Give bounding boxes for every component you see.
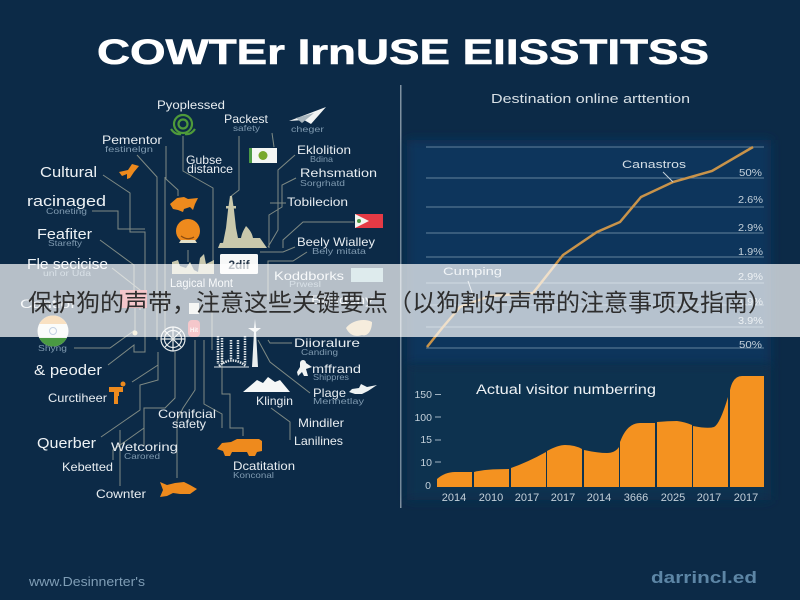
label: racinaged: [27, 193, 106, 216]
icon: city towers: [214, 336, 249, 367]
label: racinaged: racinaged: [27, 193, 106, 210]
icon: red rectangle: [120, 290, 147, 308]
label: Mindiler: Mindiler: [298, 416, 344, 430]
percent axis labels: 2.9%: [738, 272, 763, 283]
year axis: 2014: [442, 492, 466, 504]
vertical divider: [400, 85, 402, 508]
label: Koddborks: Prwesl: [289, 279, 321, 289]
icon: green dot flag: [249, 148, 277, 163]
percent axis labels: 2.6%: [738, 195, 763, 206]
label: Dliorature: Canding: [301, 347, 338, 357]
label: Fle secicise: unl or Uda: [43, 268, 91, 278]
label: & peoder: & peoder: [34, 362, 102, 379]
bar chart heading: Actual visitor numberring: [476, 382, 656, 397]
label: Comifcial safety: [158, 407, 216, 431]
year axis: 2017: [697, 492, 721, 504]
label: Cownter: Cownter: [96, 487, 146, 501]
label: Dliorature: Diioralure: [294, 336, 360, 350]
line series: [427, 147, 753, 347]
label: racinaged: Coneting: [46, 206, 87, 216]
icon: orange bird: [119, 164, 139, 179]
label: Dliorature: [294, 336, 360, 357]
percent axis labels: 1.9%: [738, 247, 763, 258]
label: mffrand: mffrand: [312, 362, 361, 376]
connector lines: [74, 133, 354, 486]
label: Rehsmation: Sorgrhatd: [300, 178, 345, 188]
label: Comifcial safety: Comifcial: [158, 407, 216, 421]
label: Feafiter: Starefty: [48, 238, 83, 248]
label: Pementor: [102, 133, 162, 154]
label: cheger: cheger: [291, 124, 324, 134]
overlay headline: 保护狗的声带，注意这些关键要点（以狗割好声带的注意事项及指南）: [28, 283, 772, 318]
label: mffrand: [312, 362, 361, 382]
label: Pementor: festinelgn: [105, 144, 153, 154]
icon: landscape flag: [351, 268, 383, 282]
label: Eklolition: Eklolition: [297, 143, 351, 157]
panel: line chart background: [407, 140, 771, 365]
label: Wetcoring: [111, 440, 178, 461]
icon: orange T figure: [109, 382, 126, 404]
label: Rehsmation: Rehsmation: [300, 166, 377, 180]
icon: dot: [132, 330, 138, 336]
year axis: 2017: [734, 492, 758, 504]
icon: running figure: [297, 360, 312, 376]
label: Kebetted: Kebetted: [62, 460, 113, 474]
label: Gubse distance: Gubse: [186, 153, 222, 167]
percent axis labels: 3.9%: [738, 316, 763, 327]
value axis: 0: [425, 480, 431, 492]
label: Wetcoring: Carored: [124, 451, 160, 461]
label: Shyng: Shyng: [38, 343, 67, 353]
icon: orange dome: [176, 219, 200, 243]
label: Wetcoring: Wetcoring: [111, 440, 178, 454]
label: Cultural: Cultural: [40, 164, 97, 181]
label: Gubse distance: distance: [187, 162, 233, 176]
label: Tobilecion: Tobilecion: [287, 195, 348, 209]
year axis: 2025: [661, 492, 685, 504]
label: Koddborks: [274, 269, 344, 289]
year axis: 2014: [587, 492, 611, 504]
label: Dcatitation: Dcatitation: [233, 459, 295, 473]
label: Legal Mont: Lagical Mont: [170, 276, 234, 290]
label: Klingin: Klingin: [256, 394, 293, 408]
line chart: [426, 147, 764, 351]
overlay band: [0, 264, 800, 337]
label: mffrand: Shippres: [313, 372, 349, 382]
callout: Canastros: Canastros: [622, 159, 687, 171]
year axis: 3666: [624, 492, 648, 504]
icon: round flag: [38, 316, 68, 346]
label: partially hidden left label: Cahtiof: [20, 297, 76, 311]
icon: tv tower: [248, 319, 261, 367]
label: Koddborks: Koddborks: [274, 269, 344, 283]
label: Beely Wialley: [297, 235, 375, 256]
panel: bar chart background: [407, 365, 771, 500]
label: Eklolition: Bdina: [310, 154, 333, 164]
footer: website: www.Desinnerter's: [28, 575, 145, 589]
icon: eiffel tower and domed landmark: [218, 196, 267, 248]
icon: orange fish: [160, 482, 197, 497]
icon: red lantern: [188, 320, 200, 337]
label: Fle secicise: Fle secicise: [27, 256, 108, 273]
label: Feafiter: Feafiter: [37, 226, 92, 243]
callout: Cumping: Cumping: [443, 266, 502, 278]
bar chart: [414, 376, 764, 504]
icon: paper plane: [289, 107, 326, 124]
callout: Canastros: [622, 159, 687, 182]
label: Curctiheer: Curctiheer: [48, 391, 107, 405]
title: COWTEr IrnUSE EIISSTITSS: [97, 33, 709, 72]
percent axis labels: 1.9%: [738, 297, 763, 308]
year axis: [442, 492, 758, 504]
label: Pyeplessed: Pyoplessed: [157, 98, 225, 112]
icon: white flag triangle: [355, 214, 369, 228]
value axis: 10: [420, 457, 432, 469]
value axis: 150: [414, 389, 432, 401]
value axis: 100: [414, 412, 432, 424]
callout: Cumping: [443, 266, 502, 298]
icon: airplane: [349, 384, 377, 394]
label: Dcatitation: Konconal: [233, 470, 274, 480]
year axis: 2010: [479, 492, 503, 504]
label: Dcatitation: [233, 459, 295, 480]
badge: 2dif: 2dif: [228, 258, 251, 272]
footer: logo: darrincl.ed: [651, 568, 757, 587]
axis ticks: [435, 394, 441, 462]
badge: 2dif: [220, 254, 258, 274]
icon: orange animal: [170, 197, 198, 212]
label: Rehsmation: [300, 166, 377, 188]
line chart heading: Destination online arttention: [491, 92, 690, 106]
label: Packest safety: safety: [233, 123, 261, 133]
icon: ferris wheel: [161, 327, 185, 351]
icon: mountain: [243, 377, 290, 392]
icon: cream shape: [346, 320, 372, 336]
label: Packest safety: [224, 112, 269, 133]
percent axis labels: 50%: [739, 168, 762, 179]
icon: skyline: [172, 254, 214, 274]
icon: orange truck animal: [217, 439, 262, 456]
percent axis labels: [738, 168, 763, 351]
value axis: 15: [420, 434, 432, 446]
label: partially hidden right label: Bandeny: [311, 293, 373, 307]
label: Eklolition: [297, 143, 351, 164]
label: Beely Wialley: Beely Wialley: [297, 235, 375, 249]
year axis: 2017: [515, 492, 539, 504]
label: Pementor: Pementor: [102, 133, 162, 147]
label: Plage: [313, 386, 365, 406]
icon: red lantern: Hit: [190, 328, 198, 334]
value axis: [414, 389, 432, 492]
label: Lanilines: Lanilines: [294, 434, 343, 448]
grid lines: [426, 147, 764, 348]
percent axis labels: 50%: [739, 340, 762, 351]
label: Beely Wialley: Bely mitata: [312, 246, 366, 256]
icon: small building: [189, 303, 199, 314]
year axis: 2017: [551, 492, 575, 504]
label: Querber: Querber: [37, 435, 96, 452]
label: Comifcial safety: safety: [172, 417, 206, 431]
label: Plage: Plage: [313, 386, 346, 400]
label: Packest safety: Packest: [224, 112, 269, 126]
icon: red flag: [355, 214, 383, 228]
icon: green wreath: [171, 115, 195, 134]
orange area bars: [437, 376, 764, 487]
label: Plage: Mennetlay: [313, 396, 365, 406]
percent axis labels: 2.9%: [738, 223, 763, 234]
label: Gubse distance: [186, 153, 233, 176]
panel: destination network: [20, 98, 383, 501]
